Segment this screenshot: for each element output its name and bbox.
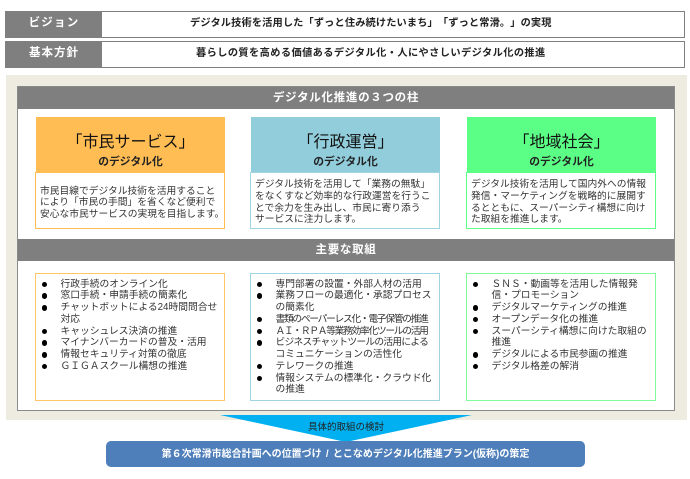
list: citizen service initiatives: 行政手続のオンライン化 — [60, 278, 168, 290]
heading: main initiatives — [18, 239, 674, 261]
vision label — [6, 12, 102, 37]
list: community initiatives: 信・プロモーション — [492, 290, 579, 301]
card heading: citizen services — [36, 117, 225, 173]
list: administration initiatives: テレワークの推進 — [276, 361, 354, 372]
basic policy statement: 暮らしの質を高める価値あるデジタル化・人にやさしいデジタル化の推進 — [196, 48, 546, 59]
basic policy label: 基本方針 — [29, 47, 79, 59]
list: community initiatives: ＳＮＳ・動画等を活用した情報発 — [492, 278, 638, 290]
community title: 「地域社会」 — [513, 134, 610, 151]
list: citizen service initiatives: マイナンバーカードの普及・活用 — [60, 337, 207, 348]
list: community initiatives: デジタル格差の解消 — [492, 361, 579, 372]
card text: community — [466, 172, 656, 229]
list: administration initiatives: の推進 — [276, 384, 305, 395]
card heading: community — [467, 117, 656, 173]
card text: administration — [250, 172, 440, 229]
panel: beige background — [6, 75, 687, 420]
banner: comprehensive plan: 第６次常滑市総合計画への位置づけ / とこなめデジタル化推進プラン(仮称)の策定 — [162, 449, 529, 460]
card text: citizen services: により「市民の手間」を省くなど便利で — [40, 197, 215, 208]
panel: white content area — [17, 86, 675, 411]
list: administration initiatives: ＡＩ・ＲＰＡ等業務効率化ツールの活用 — [276, 326, 428, 336]
list: community initiatives: デジタルによる市民参画の推進 — [492, 349, 628, 360]
vision row — [5, 11, 685, 38]
basic policy label — [6, 42, 102, 67]
list: community initiatives — [466, 273, 656, 401]
list: administration initiatives: 書類のペーパーレス化・電子保管の推進 — [276, 314, 428, 325]
heading: three pillars — [18, 87, 674, 109]
list: community initiatives: スーパーシティ構想に向けた取組の — [492, 326, 647, 336]
list: citizen service initiatives: 対応 — [60, 314, 80, 325]
card text: community: るとともに、スーパーシティ構想に向け — [471, 203, 645, 214]
list: administration initiatives: 情報システムの標準化・クラウド化 — [276, 372, 431, 384]
arrow label: 具体的取組の検討 — [308, 422, 384, 433]
vision label: ビジョン — [29, 17, 79, 29]
administration title: 「行政運営」 — [297, 134, 394, 151]
list: administration initiatives: 専門部署の設置・外部人材の活用 — [276, 278, 422, 290]
vision statement: デジタル技術を活用した「ずっと住み続けたいまち」「ずっと常滑。」の実現 — [190, 18, 552, 29]
list: citizen service initiatives: 情報セキュリティ対策の徹底 — [60, 349, 187, 360]
list: citizen service initiatives: チャットボットによる24時間問合せ — [60, 302, 217, 313]
card heading: administration — [251, 117, 440, 173]
list: administration initiatives: ビジネスチャットツールの活用による — [276, 337, 428, 348]
list: administration initiatives: コミュニケーションの活性化 — [276, 349, 402, 360]
card text: administration: をなくすなど効率的な行政運営を行うこ — [255, 191, 430, 202]
card text: administration: サービスに注力します。 — [255, 214, 361, 225]
card text: administration: デジタル技術を活用して「業務の無駄」 — [255, 179, 430, 190]
citizen title: 「市民サービス」 — [66, 134, 194, 151]
card text: community: デジタル技術を活用して国内外への情報 — [471, 179, 646, 190]
list: citizen service initiatives: ＧＩＧＡスクール構想の推進 — [60, 361, 187, 372]
list: community initiatives: オープンデータ化の推進 — [492, 314, 598, 325]
card text: community: 発信・マーケティングを戦略的に展開す — [471, 191, 646, 202]
list: administration initiatives — [250, 273, 440, 401]
card text: citizen services: 安心な市民サービスの実現を目指します。 — [40, 209, 224, 220]
list: citizen service initiatives — [35, 273, 225, 401]
community subtitle: のデジタル化 — [529, 156, 594, 168]
heading: main initiatives: 主要な取組 — [316, 244, 376, 256]
heading: three pillars: デジタル化推進の３つの柱 — [273, 92, 419, 104]
banner: comprehensive plan — [106, 441, 585, 467]
basic policy row — [5, 41, 685, 68]
list: community initiatives: 推進 — [492, 337, 511, 348]
administration subtitle: のデジタル化 — [313, 156, 378, 168]
list: citizen service initiatives: 窓口手続・申請手続の簡素化 — [60, 290, 187, 301]
list: citizen service initiatives: キャッシュレス決済の推進 — [60, 326, 177, 336]
arrow: downward triangle — [220, 415, 472, 441]
citizen subtitle: のデジタル化 — [98, 156, 163, 168]
list: community initiatives: デジタルマーケティングの推進 — [492, 302, 627, 313]
card text: citizen services: 市民目線でデジタル技術を活用すること — [40, 186, 215, 196]
card text: administration: とで余力を生み出し、市民に寄り添う — [255, 203, 420, 214]
card text: citizen services — [35, 172, 225, 229]
card text: community: た取組を推進します。 — [471, 214, 568, 225]
list: administration initiatives: の簡素化 — [276, 302, 314, 313]
list: administration initiatives: 業務フローの最適化・承認プロセス — [276, 290, 432, 301]
